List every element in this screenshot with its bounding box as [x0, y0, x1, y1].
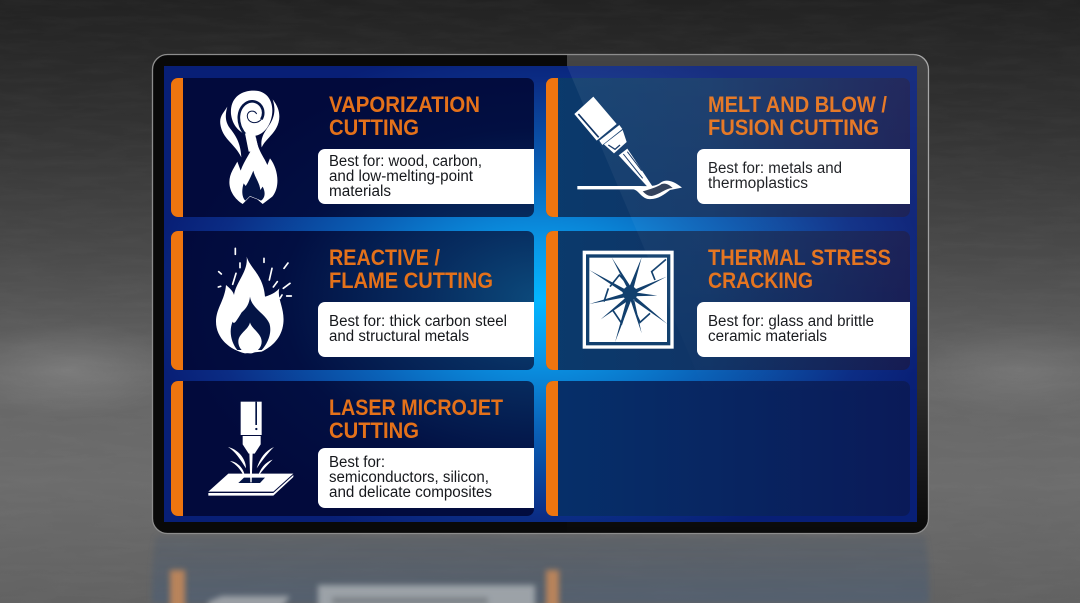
- icon: vapor swirl and flame: [220, 91, 279, 204]
- panel: laser microjet cutting: [171, 381, 534, 516]
- title: FUSION CUTTING: [708, 115, 879, 140]
- title: CRACKING: [708, 268, 813, 293]
- panel: vaporization cutting: [171, 78, 534, 217]
- best-for box: Best for: wood, carbon,: [329, 153, 482, 170]
- screen glare: [567, 66, 917, 238]
- panel: melt and blow fusion cutting: [546, 78, 910, 217]
- title: MELT AND BLOW /: [708, 92, 887, 117]
- title: FLAME CUTTING: [329, 268, 493, 293]
- tablet reflection on floor: [152, 536, 929, 603]
- best-for box: materials: [329, 183, 391, 200]
- icon: laser microjet nozzle: [208, 402, 293, 496]
- best-for box: and low-melting-point: [329, 168, 474, 185]
- screen background: [164, 66, 917, 522]
- panel: empty: [546, 381, 910, 516]
- title: CUTTING: [329, 418, 419, 443]
- title: THERMAL STRESS: [708, 245, 891, 270]
- icon: flame with sparks: [216, 248, 291, 353]
- best-for box: and structural metals: [329, 328, 469, 345]
- title: REACTIVE /: [329, 245, 440, 270]
- best-for box: [318, 302, 534, 357]
- best-for box: [697, 149, 910, 204]
- panel: reactive flame cutting: [171, 231, 534, 370]
- icon: cutting torch: [574, 97, 682, 199]
- title: CUTTING: [329, 115, 419, 140]
- best-for box: Best for: thick carbon steel: [329, 313, 507, 330]
- best-for box: and delicate composites: [329, 484, 492, 501]
- icon: cracked glass: [583, 251, 674, 349]
- best-for box: ceramic materials: [708, 328, 827, 345]
- title: LASER MICROJET: [329, 395, 503, 420]
- best-for box: [318, 149, 534, 204]
- best-for box: thermoplastics: [708, 175, 808, 192]
- best-for box: Best for: metals and: [708, 160, 842, 177]
- bezel glare: [567, 55, 929, 534]
- tablet: [152, 54, 929, 534]
- best-for box: Best for:: [329, 454, 385, 471]
- title: VAPORIZATION: [329, 92, 480, 117]
- panel: thermal stress cracking: [546, 231, 910, 370]
- best-for box: Best for: glass and brittle: [708, 313, 874, 330]
- best-for box: [697, 302, 910, 357]
- best-for box: semiconductors, silicon,: [329, 469, 489, 486]
- best-for box: [318, 448, 534, 508]
- tablet bezel: [152, 54, 928, 534]
